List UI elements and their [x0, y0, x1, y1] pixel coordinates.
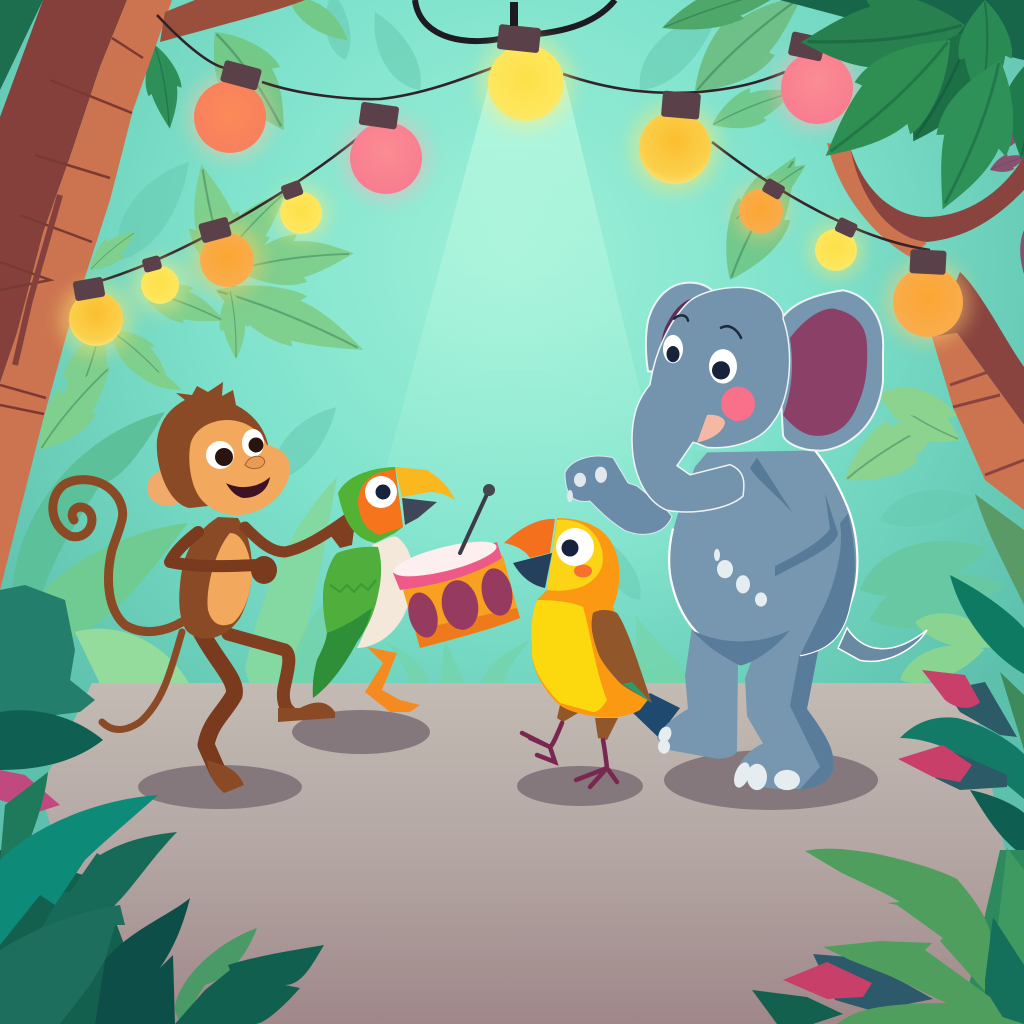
- yellow bird cheek: [574, 564, 592, 578]
- yellow bird wing: [592, 610, 652, 703]
- foreground foliage: bottom right: [752, 848, 1024, 1024]
- green toucan leg: [365, 647, 420, 712]
- elephant ear inner: [783, 309, 867, 436]
- monkey lower tail: [102, 632, 182, 730]
- yellow bird face: [547, 520, 603, 591]
- elephant right leg: [737, 605, 834, 789]
- light bulb: large yellow: [488, 2, 564, 121]
- green toucan beak: [395, 467, 455, 500]
- dark leaf: [0, 710, 103, 770]
- monkey arm reaching: [245, 520, 346, 552]
- spotlight beam: [340, 80, 700, 640]
- dark green leaf: [0, 832, 177, 1024]
- narrow green leaf: [0, 772, 48, 862]
- large teal leaf: [0, 795, 158, 945]
- monkey front hand: [251, 556, 277, 584]
- green toucan wing: [313, 547, 381, 698]
- pink bud: [0, 770, 60, 812]
- light bulb: orange red: [194, 60, 266, 153]
- dark right leaf: [985, 917, 1024, 1024]
- yellow bird eye: [556, 528, 594, 566]
- string lights: glows: [60, 37, 970, 355]
- elephant right arm: [713, 456, 838, 609]
- left midground leaves: [12, 0, 374, 685]
- elephant body shade: [800, 513, 855, 655]
- yellow bird beak: [504, 519, 555, 558]
- background foliage: faint silhouettes: [101, 0, 981, 607]
- bud one stem: [945, 682, 1017, 737]
- monkey face: [189, 420, 290, 515]
- right tree trunk and branch: [827, 143, 1024, 510]
- drum body: [403, 556, 520, 648]
- top right canopy leaves: [780, 0, 1024, 224]
- elephant mouth: [697, 415, 725, 442]
- elephant right ear: [777, 290, 883, 451]
- yellow bird body: [531, 518, 650, 717]
- bud two: [898, 745, 972, 782]
- tree branch: [160, 0, 305, 42]
- foreground foliage: bottom left: [0, 585, 324, 1024]
- monkey back foot: [278, 702, 335, 722]
- monkey torso: [179, 517, 252, 639]
- drum: [391, 484, 520, 648]
- green leaf right edge: [1000, 672, 1024, 750]
- drum skin: [391, 535, 499, 583]
- yellow bird: [504, 518, 680, 787]
- elephant head and trunk: [632, 287, 790, 512]
- deep green leaf: [95, 898, 190, 1024]
- light bulb: tiny yellow left: [141, 255, 179, 304]
- yellow bird tail: [633, 693, 680, 737]
- elephant body: [670, 450, 857, 660]
- drum rim: [393, 542, 502, 590]
- monkey front foot: [207, 760, 244, 793]
- elephant left toes: [656, 724, 674, 754]
- monkey back leg: [228, 634, 290, 712]
- monkey head: [157, 382, 268, 508]
- light bulb: small orange: [739, 177, 786, 233]
- bud three: [783, 962, 872, 999]
- elephant right hand nails: [714, 549, 767, 607]
- light bulb: pink: [350, 102, 422, 194]
- green toucan belly: [357, 537, 412, 648]
- left tree trunk: [0, 0, 305, 590]
- elephant trunk gap: [690, 449, 707, 473]
- monkey belly: [207, 533, 252, 625]
- bright green leaf: [175, 928, 257, 1024]
- elephant body outline: [669, 450, 857, 655]
- right edge backing: [960, 850, 1024, 1024]
- elephant left leg: [657, 627, 738, 759]
- bottom green leaf: [837, 1003, 1024, 1024]
- yellow bird upper legs: [557, 705, 618, 740]
- green toucan: [313, 467, 455, 712]
- right edge green leaf: [995, 848, 1024, 1000]
- light bulb: large orange right: [893, 249, 963, 337]
- light bulb: yellow far left: [69, 277, 123, 346]
- monkey hand: [325, 515, 354, 548]
- light bulb: golden: [639, 90, 711, 184]
- green toucan eye: [365, 476, 397, 508]
- elephant: [565, 283, 927, 790]
- elephant tail: [838, 628, 927, 661]
- dark leaf right: [970, 790, 1024, 856]
- light bulb: small yellow right: [815, 217, 858, 271]
- grass along the horizon: [285, 590, 690, 684]
- elephant left arm: [565, 456, 672, 534]
- elephant left ear: [646, 283, 712, 371]
- light bulb: small yellow left: [280, 180, 322, 234]
- yellow bird belly: [531, 600, 607, 712]
- elephant right leg shade: [790, 605, 834, 789]
- elephant eyes: [663, 335, 737, 384]
- right midground leaves: [656, 0, 1024, 692]
- green toucan face: [358, 470, 403, 535]
- floor shadows: [138, 710, 878, 810]
- drumstick: [460, 492, 488, 553]
- bud two stem: [935, 750, 1007, 790]
- elephant brows: [674, 315, 741, 338]
- monkey: [53, 382, 354, 793]
- teal lower leaf: [0, 905, 125, 1024]
- monkey tail: [53, 480, 182, 632]
- teal leaf upper right: [950, 575, 1024, 674]
- monkey nose: [245, 456, 265, 469]
- elephant cheek: [721, 387, 755, 421]
- bud three stem: [813, 954, 933, 1011]
- monkey smile: [226, 477, 270, 498]
- light bulb: pink right: [781, 31, 853, 124]
- green toucan wing shadow: [313, 608, 372, 698]
- monkey arm front: [170, 532, 258, 566]
- monkey ear: [147, 470, 187, 506]
- bud one: [922, 670, 980, 708]
- teal leaf middle: [900, 717, 1024, 799]
- yellow bird lower legs: [522, 723, 617, 787]
- olive leaf upper right: [975, 494, 1024, 605]
- green toucan head: [338, 467, 403, 543]
- monkey eyes: [206, 429, 264, 469]
- dark front leaf: [175, 945, 324, 1024]
- light bulb: orange left: [198, 216, 254, 287]
- second green leaf: [823, 941, 1007, 1024]
- elephant toes: [731, 760, 800, 790]
- monkey front leg: [200, 630, 234, 772]
- leaf backing: [0, 850, 170, 1024]
- drum ovals: [404, 565, 517, 641]
- elephant left hand nails: [567, 467, 607, 502]
- floor: [40, 683, 1005, 1024]
- leaf cluster upper: [0, 585, 95, 722]
- foreground foliage: right side: [898, 494, 1024, 856]
- dark bottom leaf: [752, 990, 843, 1024]
- big green leaf: [805, 849, 990, 997]
- string lights: wires: [90, 0, 930, 284]
